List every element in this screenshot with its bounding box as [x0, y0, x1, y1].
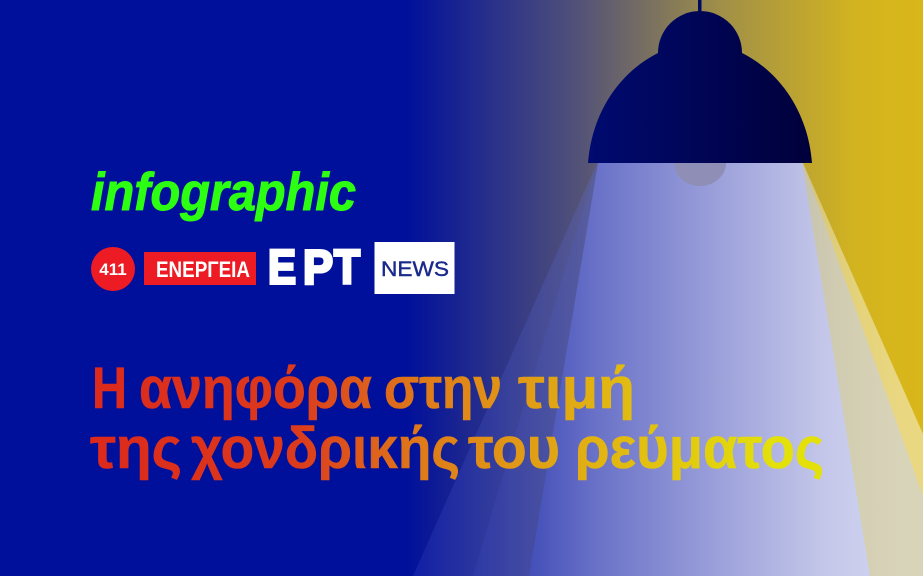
title line 2: χονδρικής [191, 416, 460, 481]
light bulb [674, 163, 726, 186]
title line 1 [92, 356, 635, 421]
title line 2: ρεύματος [575, 416, 824, 481]
logo: ΕΡΤ: Ε [268, 242, 296, 294]
lamp shade [588, 11, 812, 163]
logo: NEWS box: NEWS [381, 258, 449, 281]
logo: 411 badge [91, 247, 135, 291]
title [90, 356, 824, 481]
title line 1: Η [92, 356, 127, 421]
logo: NEWS box [374, 242, 454, 294]
title line 1: τιμή [518, 356, 635, 421]
logo: ΕΡΤ: Τ [334, 242, 360, 294]
logo: ΕΝΕΡΓΕΙΑ label: ΕΝΕΡΓΕΙΑ [156, 257, 250, 282]
logo: ΕΡΤ [268, 242, 360, 294]
icon: ceiling lamp [588, 0, 812, 186]
outer light beam [413, 163, 923, 576]
logo: ΕΡΤ: Ρ [303, 242, 333, 294]
title line 2 [90, 416, 824, 481]
title line 2: της [90, 416, 182, 481]
middle light beam [473, 163, 923, 576]
logo: 411 badge: 411 [99, 260, 127, 279]
logo row [91, 242, 454, 294]
lamp cord [698, 0, 702, 13]
light beams [413, 163, 923, 576]
title line 1: στην [384, 356, 502, 421]
title line 1: ανηφόρα [139, 356, 372, 421]
main light beam [529, 163, 870, 576]
heading: infographic: infographic [91, 163, 356, 222]
logo: ΕΝΕΡΓΕΙΑ label [144, 252, 256, 285]
title line 2: του [468, 416, 560, 481]
